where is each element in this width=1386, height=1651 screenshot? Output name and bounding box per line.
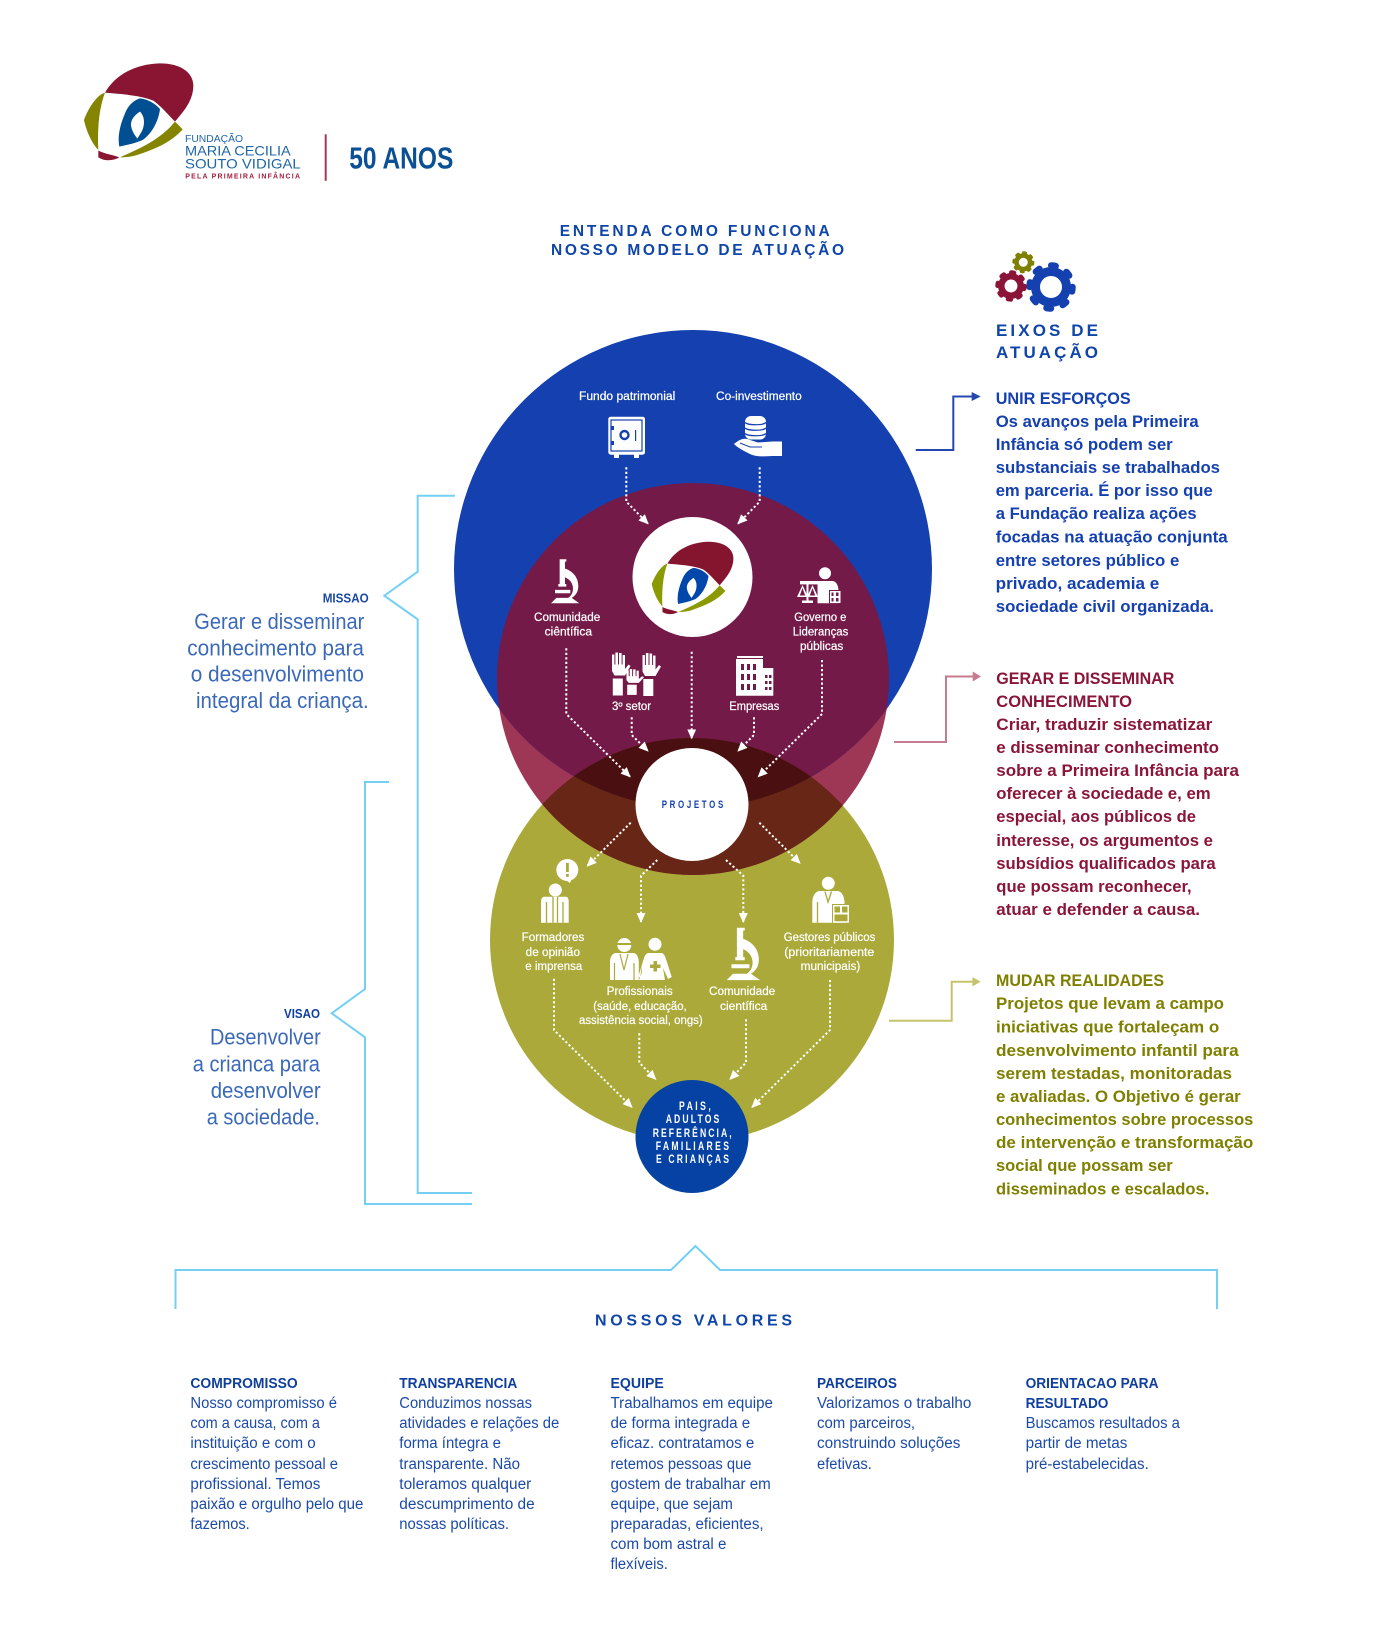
icon: gears <box>998 253 1072 308</box>
circle: pais, adultos referência, familiares e crianças: E CRIANÇAS <box>656 1154 729 1166</box>
heading: eixos de atuação: EIXOS DE <box>996 321 1098 340</box>
value: parceiros: construindo soluções <box>817 1435 961 1452</box>
circle: pais, adultos referência, familiares e crianças: PAIS, <box>679 1101 711 1113</box>
value: orientação para resultado: partir de metas <box>1026 1435 1128 1452</box>
text block: mudar realidades: Projetos que levam a campo <box>996 994 1224 1013</box>
text block: gerar e disseminar conhecimento: sobre a Primeira Infância para <box>996 761 1240 780</box>
logo: Fundação Maria Cecilia Souto Vidigal <box>84 63 453 181</box>
logo wordmark: FUNDAÇÃO <box>185 132 243 145</box>
value: parceiros: Valorizamos o trabalho <box>817 1395 971 1412</box>
node: profissionais: Profissionais <box>607 986 673 998</box>
node: gestores públicos: (prioritariamente <box>784 947 874 959</box>
node: gestores públicos <box>784 877 876 973</box>
node: formadores de opinião: de opinião <box>526 947 580 959</box>
node: governo e lideranças públicas: públicas <box>800 641 844 653</box>
text block: gerar e disseminar conhecimento: atuar e defender a causa. <box>996 900 1200 919</box>
icon: justice and official <box>797 567 841 603</box>
circle: pais, adultos referência, familiares e crianças: FAMILIARES <box>656 1141 729 1153</box>
text: missão: Gerar e disseminar <box>194 609 364 634</box>
text block: mudar realidades: e avaliadas. O Objetivo é gerar <box>996 1087 1241 1106</box>
heading: eixos de atuação <box>996 321 1098 362</box>
node: formadores de opinião: Formadores <box>522 932 585 944</box>
node: fundo patrimonial: Fundo patrimonial <box>579 391 675 403</box>
node: fundo patrimonial <box>579 391 675 458</box>
text block: unir esforços: Os avanços pela Primeira <box>996 412 1199 431</box>
text block: unir esforços <box>996 389 1228 616</box>
node: profissionais <box>579 938 703 1027</box>
value: equipe: de forma integrada e <box>610 1415 750 1432</box>
logo wordmark: SOUTO VIDIGAL <box>185 155 301 171</box>
text: missão: MISSAO <box>323 591 369 606</box>
text block: unir esforços: a Fundação realiza ações <box>996 504 1197 523</box>
big blue gear <box>1030 266 1072 308</box>
value: transparência: atividades e relações de <box>399 1415 559 1432</box>
title <box>551 223 844 259</box>
circle: projetos: PROJETOS <box>662 799 724 811</box>
node: profissionais: assistência social, ongs) <box>579 1015 703 1027</box>
node: formadores de opinião <box>522 859 585 973</box>
node: profissionais: (saúde, educação, <box>593 1001 687 1013</box>
circle: maroon <box>497 483 889 875</box>
heading: eixos de atuação: ATUAÇÃO <box>996 342 1098 362</box>
text: missão: o desenvolvimento <box>191 662 364 687</box>
node: formadores de opinião: e imprensa <box>525 961 583 973</box>
circle: olive <box>490 738 894 1142</box>
icon: public manager <box>812 877 849 923</box>
text block: gerar e disseminar conhecimento: subsídios qualificados para <box>996 854 1216 873</box>
icon: buildings <box>736 656 773 696</box>
circle: pais, adultos referência, familiares e crianças: ADULTOS <box>666 1114 720 1126</box>
value: equipe: retemos pessoas que <box>610 1456 752 1473</box>
value: orientação para resultado: pré-estabelecidas. <box>1026 1456 1149 1473</box>
value: transparência: toleramos qualquer <box>399 1476 531 1493</box>
title: NOSSO MODELO DE ATUAÇÃO <box>551 241 844 259</box>
icon: person with speech bubble <box>541 859 578 923</box>
50 anos: 50 ANOS <box>349 140 453 175</box>
text block: gerar e disseminar conhecimento: interesse, os argumentos e <box>996 831 1213 850</box>
text block: gerar e disseminar conhecimento <box>996 669 1240 919</box>
value: transparência: Conduzimos nossas <box>399 1395 532 1412</box>
text block: gerar e disseminar conhecimento: que possam reconhecer, <box>996 877 1192 896</box>
value: parceiros <box>817 1376 971 1473</box>
logo wordmark: MARIA CECILIA <box>185 143 291 159</box>
node: co-investimento: Co-investimento <box>716 391 802 403</box>
text block: gerar e disseminar conhecimento: especial, aos públicos de <box>996 807 1196 826</box>
value: transparência: descumprimento de <box>399 1496 535 1513</box>
center logo circle <box>632 517 752 637</box>
value: orientação para resultado <box>1026 1376 1180 1473</box>
text block: gerar e disseminar conhecimento: Criar, traduzir sistematizar <box>996 715 1213 734</box>
text block: mudar realidades: social que possam ser <box>996 1156 1173 1175</box>
value: compromisso: profissional. Temos <box>190 1476 321 1493</box>
circle: projetos <box>636 748 748 861</box>
value: equipe: preparadas, eficientes, <box>610 1516 764 1533</box>
text: visão: a sociedade. <box>207 1105 320 1130</box>
value: equipe: EQUIPE <box>610 1376 664 1392</box>
text block: gerar e disseminar conhecimento: CONHECIMENTO <box>996 692 1132 711</box>
logo mark <box>84 63 193 160</box>
text: missão: integral da criança. <box>196 688 369 713</box>
connector: mudar realidades <box>889 977 981 1021</box>
circle: pais, adultos referência, familiares e crianças: REFERÊNCIA, <box>653 1126 732 1140</box>
title: ENTENDA COMO FUNCIONA <box>560 223 830 240</box>
logo wordmark <box>185 132 301 180</box>
node: governo e lideranças públicas: Lideranças <box>793 627 849 639</box>
node: governo e lideranças públicas <box>793 567 849 653</box>
text block: mudar realidades: disseminados e escalados. <box>996 1180 1209 1198</box>
value: compromisso: fazemos. <box>190 1516 250 1533</box>
text block: unir esforços: privado, academia e <box>996 574 1159 593</box>
value: equipe: Trabalhamos em equipe <box>610 1395 773 1412</box>
bracket: visão <box>332 782 472 1204</box>
value: transparência: nossas políticas. <box>399 1516 509 1533</box>
text block: unir esforços: Infância só podem ser <box>996 435 1173 454</box>
icon: raised hands <box>612 652 661 696</box>
text block: mudar realidades <box>996 971 1253 1198</box>
value: parceiros: com parceiros, <box>817 1415 915 1432</box>
circle: blue <box>454 330 932 808</box>
value: equipe <box>610 1376 773 1573</box>
value: compromisso: instituição e com o <box>190 1435 316 1452</box>
arrows: dotted flow into the foundation and projects <box>554 467 830 1107</box>
value: parceiros: PARCEIROS <box>817 1376 897 1392</box>
circle: pais, adultos referência, familiares e crianças <box>636 1080 748 1193</box>
logo wordmark: PELA PRIMEIRA INFÂNCIA <box>185 171 300 180</box>
node: 3º setor: 3º setor <box>612 701 651 713</box>
text block: unir esforços: entre setores público e <box>996 551 1179 570</box>
bracket: nossos valores <box>176 1246 1217 1309</box>
text block: mudar realidades: iniciativas que fortaleçam o <box>996 1018 1219 1036</box>
text block: mudar realidades: conhecimentos sobre processos <box>996 1110 1253 1129</box>
heading: nossos valores: NOSSOS VALORES <box>595 1313 792 1330</box>
value: compromisso: crescimento pessoal e <box>190 1456 338 1473</box>
value: transparência: transparente. Não <box>399 1456 520 1473</box>
text: missão <box>187 591 369 713</box>
text block: unir esforços: substanciais se trabalhados <box>996 458 1220 477</box>
value: compromisso: com a causa, com a <box>190 1415 320 1432</box>
bracket: missão <box>384 496 472 1193</box>
node: empresas: Empresas <box>729 701 780 713</box>
node: gestores públicos: Gestores públicos <box>784 932 876 944</box>
text: visão: desenvolver <box>211 1078 321 1103</box>
value: transparência <box>399 1376 559 1533</box>
value: parceiros: efetivas. <box>817 1456 872 1473</box>
text block: mudar realidades: serem testadas, monitoradas <box>996 1064 1232 1083</box>
connector: gerar e disseminar <box>894 672 981 742</box>
node: co-investimento <box>716 391 802 456</box>
value: transparência: forma íntegra e <box>399 1435 501 1452</box>
text block: unir esforços: sociedade civil organizada. <box>996 597 1214 616</box>
node: comunidade científica (olive): Comunidade <box>709 986 775 998</box>
text block: gerar e disseminar conhecimento: GERAR E DISSEMINAR <box>996 669 1174 688</box>
icon: doctor and nurse <box>610 938 672 980</box>
venn diagram circles <box>454 330 932 1142</box>
icon: coins on hand <box>734 416 782 456</box>
text: visão <box>193 1006 321 1130</box>
value: equipe: equipe, que sejam <box>610 1496 733 1513</box>
value: equipe: com bom astral e <box>610 1536 726 1553</box>
value: compromisso: COMPROMISSO <box>190 1376 298 1392</box>
maroon gear <box>998 272 1024 300</box>
connector: unir esforços <box>916 392 981 450</box>
value: equipe: flexíveis. <box>610 1556 668 1573</box>
text block: unir esforços: UNIR ESFORÇOS <box>996 389 1131 408</box>
value: compromisso: Nosso compromisso é <box>190 1395 337 1412</box>
text: visão: a crianca para <box>193 1051 321 1076</box>
node: gestores públicos: municipais) <box>801 961 860 973</box>
node: comunidade científica (maroon): Comunidade <box>534 612 600 624</box>
node: comunidade científica (olive): científica <box>720 1001 768 1013</box>
text block: gerar e disseminar conhecimento: e disseminar conhecimento <box>996 738 1219 757</box>
value: equipe: gostem de trabalhar em <box>610 1476 771 1493</box>
value: equipe: eficaz. contratamos e <box>610 1435 754 1452</box>
icon: safe <box>608 417 645 458</box>
node: governo e lideranças públicas: Governo e <box>794 612 846 624</box>
node: 3º setor <box>612 652 661 713</box>
text block: mudar realidades: MUDAR REALIDADES <box>996 971 1164 990</box>
value: orientação para resultado: ORIENTACAO PARA <box>1026 1376 1159 1392</box>
node: comunidade científica (maroon) <box>534 559 600 639</box>
text: visão: Desenvolver <box>210 1025 321 1050</box>
text block: mudar realidades: de intervenção e transformação <box>996 1133 1253 1152</box>
node: comunidade científica (olive) <box>709 928 775 1013</box>
node: comunidade científica (maroon): ciêntífica <box>545 627 593 639</box>
text block: unir esforços: focadas na atuação conjunta <box>996 528 1228 546</box>
olive gear <box>1014 253 1033 272</box>
value: orientação para resultado: Buscamos resultados a <box>1026 1415 1180 1432</box>
node: empresas <box>729 656 780 713</box>
text block: gerar e disseminar conhecimento: oferecer à sociedade e, em <box>996 784 1211 803</box>
value: compromisso: paixão e orgulho pelo que <box>190 1496 363 1513</box>
text: visão: VISAO <box>284 1006 320 1021</box>
value: compromisso <box>190 1376 363 1533</box>
text block: unir esforços: em parceria. É por isso que <box>996 481 1213 500</box>
value: transparência: TRANSPARENCIA <box>399 1376 518 1392</box>
value: orientação para resultado: RESULTADO <box>1026 1396 1108 1412</box>
text: missão: conhecimento para <box>187 636 365 661</box>
text block: mudar realidades: desenvolvimento infantil para <box>996 1041 1239 1060</box>
